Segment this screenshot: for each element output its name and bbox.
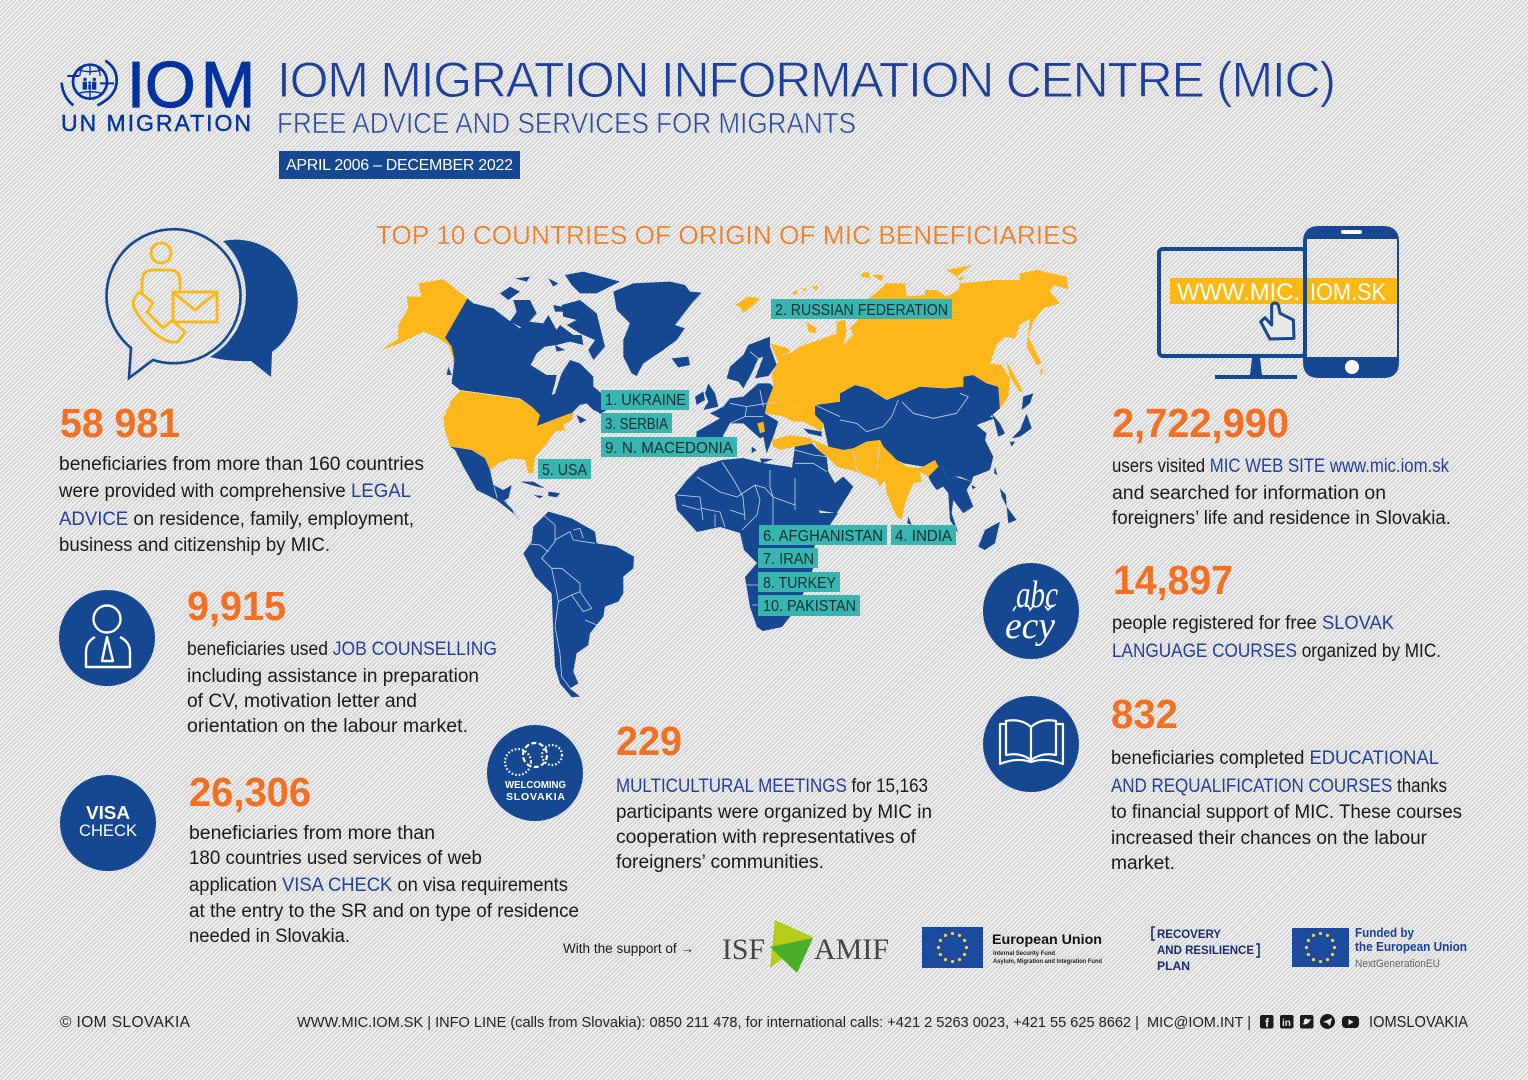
logo: Funded by the European Union [1292,926,1467,970]
statistic: educational courses: 832 [1111,691,1178,737]
statistic: multicultural meetings: cooperation with representatives of [616,827,917,848]
title: IOM MIGRATION INFORMATION CENTRE (MIC) [277,52,1336,108]
icon: website on monitor and phone: WWW.MIC. [1177,279,1300,306]
icon: visa check badge: CHECK [79,821,138,840]
icon: handwriting letters [983,563,1079,659]
statistic: job counselling: beneficiaries used JOB COUNSELLING [187,639,497,660]
statistic: visa check [189,769,579,947]
logo: European Union funds: Internal Security Fund [993,951,1055,957]
statistic: language courses: 14,897 [1113,557,1233,603]
logo: European Union funds: European Union [992,931,1102,947]
icon: handwriting letters: ecy [1005,605,1055,647]
statistic: multicultural meetings [616,718,932,873]
support note: With the support of → [563,941,694,956]
map label: 2. Russian Federation: 2. RUSSIAN FEDERATION [775,302,948,319]
date badge: APRIL 2006 – DECEMBER 2022 [286,157,513,174]
logo wordmark IOM: IOM [127,48,255,121]
statistic: website users: foreigners’ life and residence in Slovakia. [1112,508,1451,529]
map label: 1. Ukraine: 1. UKRAINE [605,392,686,409]
footer handle: IOMSLOVAKIA [1369,1014,1469,1031]
statistic: website users [1112,400,1451,529]
statistic: educational courses [1111,691,1462,874]
map label: 7. Iran: 7. IRAN [763,551,814,568]
statistic: visa check: beneficiaries from more than [189,823,435,844]
map label: 6. Afghanistan: 6. AFGHANISTAN [763,528,883,545]
icon: open book [983,696,1079,792]
icon: job counselling person [59,590,155,686]
icon: IOM globe emblem [62,61,117,105]
icon: speech bubbles with contact symbols [107,229,298,378]
map: Eurasia [695,265,1068,550]
logo: Recovery and Resilience Plan [1152,927,1259,973]
statistic: educational courses: market. [1111,853,1175,874]
map label: 5. USA: 5. USA [542,462,587,479]
statistic: website users: users visited MIC WEB SITE www.mic.iom.sk [1112,456,1449,477]
statistic: legal advice: were provided with comprehensive LEGAL [58,481,411,502]
statistic: visa check: 26,306 [189,769,311,815]
statistic: language courses: people registered for free SLOVAK [1112,613,1394,634]
map: South America [523,512,634,697]
social media icons [1260,1014,1359,1030]
logo tagline: UN MIGRATION [61,110,251,136]
logo: Funded by the European Union: the European Union [1355,940,1467,954]
icon: welcoming Slovakia badge: WELCOMING [505,779,566,791]
logo: Recovery and Resilience Plan: AND RESILIENCE [1157,943,1254,957]
footer contact line: WWW.MIC.IOM.SK | INFO LINE (calls from Slovakia): 0850 211 478, for international calls: +421 2 5263 0023, +421 55 625 8662 | MIC@IOM.INT | [297,1014,1251,1031]
statistic: visa check: 180 countries used services of web [189,848,482,869]
statistic: language courses: LANGUAGE COURSES organized by MIC. [1112,641,1441,662]
statistic: job counselling: of CV, motivation letter and [187,691,417,712]
statistic: website users: and searched for information on [1112,483,1386,504]
logo: European Union funds [922,927,1102,968]
map label: 3. Serbia: 3. SERBIA [605,416,668,433]
statistic: educational courses: increased their chances on the labour [1111,828,1428,849]
statistic: legal advice: beneficiaries from more than 160 countries [59,454,424,475]
statistic: legal advice: business and citizenship by MIC. [59,535,330,556]
icon: handwriting letters: abc [1016,574,1058,616]
statistic: multicultural meetings: participants were organized by MIC in [616,802,932,823]
statistic: visa check: needed in Slovakia. [189,926,350,947]
statistic: multicultural meetings: 229 [616,718,682,764]
statistic: multicultural meetings: MULTICULTURAL MEETINGS for 15,163 [616,776,928,797]
icon: visa check badge: VISA [86,802,130,823]
icon: welcoming Slovakia badge: SLOVAKIA [506,791,565,803]
icon: website on monitor and phone: IOM.SK [1310,279,1386,306]
statistic: job counselling [187,583,497,737]
date badge [279,151,520,179]
statistic: educational courses: AND REQUALIFICATION COURSES thanks [1111,776,1447,797]
map label: 8. Turkey: 8. TURKEY [763,575,836,592]
icon: website on monitor and phone [1159,226,1399,379]
social media icons: in [1282,1018,1291,1029]
map label: 4. India: 4. INDIA [895,528,952,545]
statistic: website users: 2,722,990 [1112,400,1289,446]
map heading: TOP 10 COUNTRIES OF ORIGIN OF MIC BENEFICIARIES [376,220,1078,250]
statistic: educational courses: to financial support of MIC. These courses [1111,802,1462,823]
logo: Funded by the European Union: NextGenerationEU [1355,958,1440,970]
world map [382,265,1068,697]
logo: Recovery and Resilience Plan: RECOVERY [1157,927,1221,941]
icon: welcoming Slovakia badge [487,725,583,821]
logo: ISF AMIF [722,920,889,973]
statistic: legal advice: 58 981 [60,400,180,446]
footer copyright: © IOM SLOVAKIA [60,1014,191,1031]
subtitle: FREE ADVICE AND SERVICES FOR MIGRANTS [277,108,856,140]
map: North America [382,272,702,520]
statistic: language courses [1112,557,1441,662]
statistic: job counselling: orientation on the labour market. [187,716,468,737]
logo: ISF AMIF: ISF [722,933,765,966]
map: Africa [675,458,838,631]
logo: ISF AMIF: AMIF [814,933,889,966]
statistic: job counselling: including assistance in preparation [187,666,479,687]
statistic: job counselling: 9,915 [187,583,286,629]
social media icons: f [1265,1016,1270,1030]
statistic: legal advice: ADVICE on residence, family, employment, [59,509,414,530]
map label: 9. N. Macedonia: 9. N. MACEDONIA [605,440,733,457]
statistic: educational courses: beneficiaries completed EDUCATIONAL [1111,748,1439,769]
logo: Recovery and Resilience Plan: PLAN [1157,959,1190,973]
icon: visa check badge [60,775,156,871]
IOM logo [61,48,255,136]
statistic: multicultural meetings: foreigners’ communities. [616,852,824,873]
map label: 10. Pakistan: 10. PAKISTAN [763,598,856,615]
statistic: visa check: application VISA CHECK on visa requirements [189,875,568,896]
statistic: visa check: at the entry to the SR and on type of residence [189,901,579,922]
statistic: legal advice [58,400,424,556]
logo: Funded by the European Union: Funded by [1355,926,1414,940]
logo: European Union funds: Asylum, Migration and Integration Fund [993,959,1102,965]
